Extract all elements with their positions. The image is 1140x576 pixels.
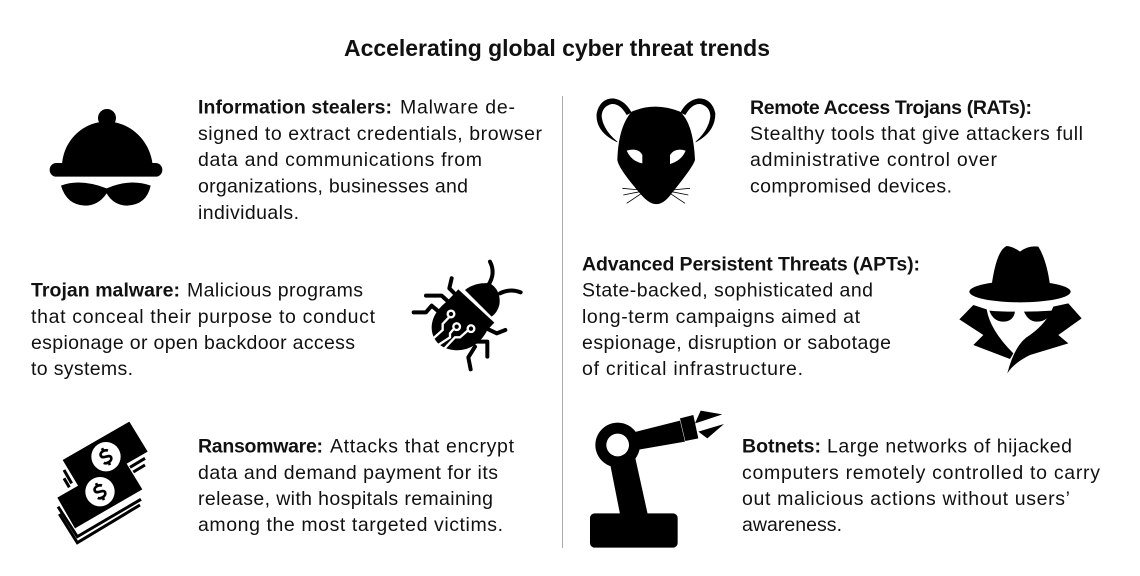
text: ransomware: release, with hospitals remaining <box>198 488 493 510</box>
text: advanced persistent threats: long-term campaigns aimed at <box>582 306 861 328</box>
text: ransomware: Ransomware: <box>198 436 323 458</box>
text: information stealers: data and communications from <box>198 149 482 171</box>
text: information stealers: individuals. <box>198 202 299 224</box>
text: trojan malware: Trojan malware: <box>31 280 180 302</box>
icon: robotic arm <box>590 411 724 548</box>
text: trojan malware: espionage or open backdoor access <box>31 332 355 354</box>
icon: circuit bug <box>414 262 521 369</box>
text: information stealers: organizations, businesses and <box>198 176 468 198</box>
text: botnets: computers remotely controlled to carry <box>742 462 1100 484</box>
text: ransomware: Attacks that encrypt <box>330 436 515 458</box>
icon: hat and sunglasses <box>50 109 162 206</box>
text: ransomware <box>198 436 515 536</box>
text: advanced persistent threats: of critical infrastructure. <box>582 358 803 380</box>
icon: spy in hat and coat <box>959 246 1082 373</box>
text: remote access trojans: compromised devices. <box>750 176 952 198</box>
text: advanced persistent threats: Advanced Persistent Threats (APTs): <box>582 254 920 276</box>
text: botnets: awareness. <box>742 514 842 536</box>
text: remote access trojans: administrative control over <box>750 149 998 171</box>
text: information stealers: Malware de- <box>400 96 515 118</box>
title: Accelerating global cyber threat trends <box>344 35 770 61</box>
text: botnets: Large networks of hijacked <box>827 436 1072 458</box>
text: advanced persistent threats: espionage, disruption or sabotage <box>582 332 891 354</box>
text: trojan malware: that conceal their purpose to conduct <box>31 306 376 328</box>
text: botnets: Botnets: <box>742 436 821 458</box>
text: remote access trojans: Stealthy tools that give attackers full <box>750 123 1083 145</box>
text: ransomware: data and demand payment for its <box>198 462 498 484</box>
text: advanced persistent threats <box>582 254 920 380</box>
text: botnets: out malicious actions without users’ <box>742 488 1070 510</box>
text: remote access trojans: Remote Access Trojans (RATs): <box>750 97 1032 119</box>
icon: stacks of money <box>57 422 148 543</box>
text: ransomware: among the most targeted victims. <box>198 514 503 536</box>
text: information stealers <box>198 96 542 224</box>
text: advanced persistent threats: State-backed, sophisticated and <box>582 280 873 302</box>
text: trojan malware <box>31 280 376 380</box>
text: trojan malware: Malicious programs <box>187 280 363 302</box>
text: botnets <box>742 436 1100 536</box>
icon: rat head <box>597 98 715 204</box>
text: remote access trojans <box>750 97 1083 198</box>
text: information stealers: Information stealers: <box>198 96 392 118</box>
text: information stealers: signed to extract credentials, browser <box>198 123 542 145</box>
text: trojan malware: to systems. <box>31 358 133 380</box>
